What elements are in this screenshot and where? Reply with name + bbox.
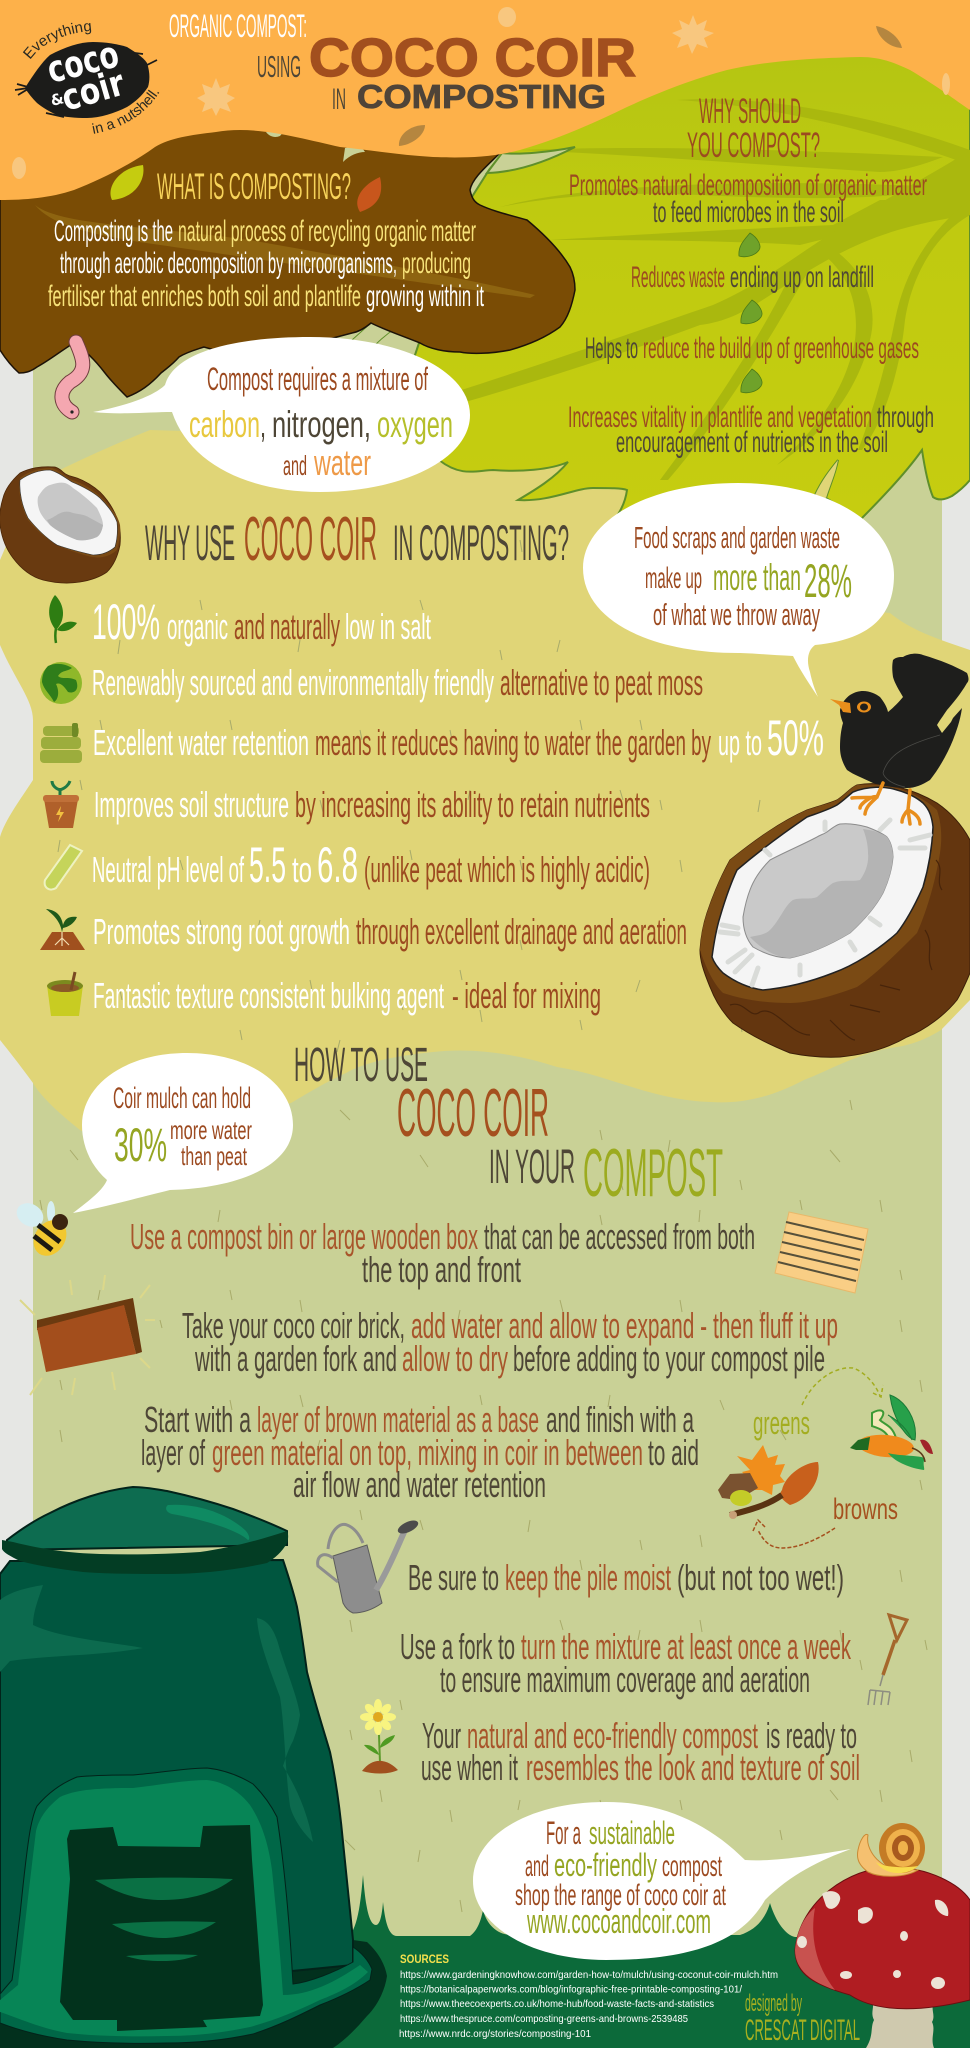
icon: soil mound with sprout bbox=[40, 909, 85, 950]
speech bubble: sustainable compost: www.cocoandcoir.com bbox=[526, 1903, 711, 1941]
label: greens: greens bbox=[753, 1405, 810, 1441]
text: what is composting paragraph: fertiliser that enriches both soil and plantlife bbox=[48, 280, 361, 313]
text: step 3: to aid bbox=[648, 1432, 699, 1473]
logo: everything coco and coir in a nutshell: coco bbox=[43, 33, 123, 92]
list: benefits of coco coir: up to bbox=[718, 722, 762, 763]
title: COMPOSTING bbox=[357, 78, 606, 115]
icon: globe bbox=[40, 662, 82, 704]
list: benefits of coco coir bbox=[92, 594, 824, 1016]
speech bubble: compost mixture: oxygen bbox=[377, 404, 453, 445]
speech bubble: food scraps bbox=[583, 483, 894, 697]
text: what is composting paragraph: growing within it bbox=[366, 280, 484, 313]
text: what is composting paragraph: producing bbox=[402, 247, 471, 280]
speech bubble: sustainable compost: sustainable bbox=[589, 1815, 675, 1851]
text: WHAT IS COMPOSTING? bbox=[157, 166, 351, 207]
bin lid bbox=[7, 1487, 287, 1550]
speech bubble: coir mulch: more water bbox=[170, 1115, 252, 1145]
illustration: compost bin bbox=[0, 1487, 387, 2048]
list: benefits of coco coir: Excellent water retention bbox=[93, 722, 309, 763]
text: step 3 bbox=[141, 1399, 699, 1505]
text: step 5: Use a fork to bbox=[400, 1626, 515, 1667]
text: step 2: Take your coco coir brick, bbox=[182, 1305, 405, 1346]
text: step 3: Start with a bbox=[144, 1399, 252, 1440]
list: benefits of coco coir: alternative to peat moss bbox=[500, 662, 703, 703]
text: designed by credit: designed by bbox=[745, 1990, 802, 2017]
text: step 3: layer of brown material as a base bbox=[257, 1399, 539, 1440]
speech bubble: food scraps: of what we throw away bbox=[653, 597, 820, 632]
text: step 4 bbox=[408, 1557, 844, 1598]
speech bubble: sustainable compost: shop the range of coco coir at bbox=[515, 1879, 726, 1912]
text: COMPOST bbox=[583, 1135, 723, 1211]
icon: watering can bbox=[318, 1518, 420, 1613]
grass ground bbox=[330, 1875, 970, 2048]
brown blob panel bbox=[0, 120, 575, 397]
speech bubble: sustainable compost: compost bbox=[662, 1850, 722, 1883]
list: benefits of coco coir: low in salt bbox=[345, 606, 431, 647]
grey left margin wedge bbox=[0, 645, 33, 837]
heading: how to use coco coir in your compost: HOW TO USE bbox=[294, 1039, 428, 1092]
list: benefits of coco coir: organic bbox=[167, 606, 228, 647]
list: why compost benefits bbox=[568, 169, 934, 459]
speech bubble: food scraps: more than bbox=[713, 557, 801, 598]
text: sources: https://botanicalpaperworks.com/blog/infographic-free-printable-composting-101/ bbox=[400, 1984, 742, 1996]
list: benefits of coco coir: 50% bbox=[767, 710, 824, 766]
icon: coir brick bbox=[20, 1275, 155, 1395]
speech bubble: compost mixture bbox=[93, 337, 470, 492]
leaf: lime green background for why compost bbox=[352, 30, 970, 523]
speech bubble: food scraps: 28% bbox=[804, 554, 852, 607]
text: step 6: is ready to bbox=[766, 1715, 857, 1756]
list: benefits of coco coir: Neutral pH level of bbox=[92, 849, 245, 890]
speech bubble: compost mixture: water bbox=[313, 442, 371, 483]
yellow wave background bbox=[0, 430, 970, 1150]
text: step 1 bbox=[130, 1216, 755, 1290]
orange header band bbox=[0, 0, 970, 200]
text: what is composting paragraph: Composting is the bbox=[54, 215, 173, 248]
arrow: browns to greens bbox=[802, 1368, 883, 1405]
logo: everything coco and coir in a nutshell bbox=[14, 22, 160, 134]
speech bubble: coir mulch bbox=[73, 1053, 293, 1213]
text: sources: https://www.nrdc.org/stories/composting-101 bbox=[399, 2028, 591, 2040]
text: step 1: Use a compost bin or large wooden box bbox=[130, 1216, 478, 1257]
list: why compost benefits: Reduces waste bbox=[631, 261, 725, 294]
logo: everything coco and coir in a nutshell: & bbox=[49, 89, 66, 110]
title: IN bbox=[332, 83, 346, 116]
text: step 4: keep the pile moist bbox=[505, 1557, 671, 1598]
icon: bucket with trowel bbox=[47, 972, 83, 1016]
title bbox=[169, 8, 636, 116]
text: step 3: green material on top, mixing in coir in between bbox=[212, 1432, 643, 1473]
text: step 1: the top and front bbox=[362, 1249, 521, 1290]
arrow: greens to browns bbox=[753, 1520, 835, 1548]
logo: everything coco and coir in a nutshell: in a nutshell. bbox=[92, 90, 160, 134]
speech bubble: coir mulch: Coir mulch can hold bbox=[113, 1082, 251, 1115]
text: what is composting paragraph bbox=[48, 215, 484, 313]
illustration: brown leaves bbox=[718, 1445, 819, 1519]
text: designed by credit bbox=[745, 1990, 860, 2047]
logo: everything coco and coir in a nutshell: coir bbox=[57, 63, 129, 120]
speech bubble: compost mixture: , bbox=[260, 404, 266, 445]
logo: everything coco and coir in a nutshell: Everything bbox=[22, 22, 92, 59]
text: step 5 bbox=[400, 1626, 852, 1700]
icon: sprout bbox=[49, 595, 77, 643]
speech bubble: food scraps: make up bbox=[645, 562, 702, 595]
icon: stacked coir bbox=[40, 723, 82, 763]
text: step 2: allow to dry bbox=[402, 1338, 508, 1379]
speech bubble: compost mixture: and bbox=[283, 450, 307, 481]
speech bubble: compost mixture: nitrogen, bbox=[272, 404, 371, 445]
list: benefits of coco coir: Improves soil structure bbox=[94, 784, 289, 825]
title: USING bbox=[257, 49, 301, 84]
text: step 6: Your bbox=[422, 1715, 461, 1756]
list: benefits of coco coir: Promotes strong root growth bbox=[93, 911, 350, 952]
text: sources: https://www.gardeningknowhow.com/garden-how-to/mulch/using-coconut-coir-mulch.htm bbox=[400, 1969, 778, 1981]
text: step 6 bbox=[421, 1715, 860, 1788]
icon: bee bbox=[12, 1198, 73, 1262]
text: sources: https://www.thespruce.com/composting-greens-and-browns-2539485 bbox=[400, 2013, 688, 2025]
icon: garden fork bbox=[868, 1615, 907, 1705]
text: step 4: (but not too wet!) bbox=[677, 1557, 844, 1598]
speech bubble: sustainable compost: and bbox=[525, 1850, 549, 1883]
text: what is composting paragraph: through aerobic decomposition by microorganisms, bbox=[60, 247, 397, 280]
list: benefits of coco coir: Renewably sourced and environmentally friendly bbox=[92, 662, 494, 703]
heading: why use coco coir in composting: WHY USE bbox=[145, 515, 235, 571]
text: step 2: with a garden fork and bbox=[194, 1338, 397, 1379]
heading: why should you compost bbox=[687, 92, 820, 165]
speech bubble: compost mixture: carbon bbox=[189, 404, 260, 445]
list: benefits of coco coir: - ideal for mixing bbox=[452, 975, 601, 1016]
illustration: blackbird bbox=[830, 654, 968, 824]
text: what is composting paragraph: natural process of recycling organic matter bbox=[178, 215, 476, 248]
list: benefits of coco coir: 100% bbox=[92, 594, 160, 650]
list: benefits of coco coir: 6.8 bbox=[317, 837, 358, 893]
illustration: green scraps bbox=[850, 1395, 933, 1470]
icon: small coconut bbox=[0, 467, 120, 583]
speech bubble: compost mixture: Compost requires a mixture of bbox=[207, 361, 428, 397]
list: benefits of coco coir: by increasing its ability to retain nutrients bbox=[295, 784, 650, 825]
text: sources: SOURCES bbox=[400, 1952, 449, 1966]
speech bubble: coir mulch: 30% bbox=[114, 1118, 167, 1171]
heading: how to use coco coir in your compost: IN YOUR bbox=[489, 1141, 575, 1194]
speech bubble: sustainable compost: eco-friendly bbox=[554, 1847, 657, 1883]
list: benefits of coco coir: (unlike peat which is highly acidic) bbox=[364, 849, 650, 890]
text: step 6: use when it bbox=[421, 1747, 518, 1788]
speech bubble: sustainable compost bbox=[473, 1802, 851, 1960]
icon: flower bbox=[360, 1699, 398, 1774]
text: IN COMPOSTING? bbox=[393, 515, 569, 571]
illustration: big coconut bbox=[700, 784, 970, 1057]
list: why compost benefits: Helps to bbox=[585, 332, 638, 365]
icon: orange leaf bbox=[357, 177, 381, 212]
title: COCO COIR bbox=[309, 28, 636, 88]
text: sources bbox=[399, 1952, 778, 2040]
list: benefits of coco coir: to bbox=[292, 849, 312, 890]
text: sources: https://www.theecoexperts.co.uk/home-hub/food-waste-facts-and-statistics bbox=[400, 1998, 714, 2010]
text: step 2 bbox=[182, 1305, 838, 1379]
decorative leaves on header bbox=[12, 7, 950, 179]
text: step 3: air flow and water retention bbox=[293, 1464, 546, 1505]
text: step 3: layer of bbox=[141, 1432, 206, 1473]
icon: plant pot bbox=[43, 781, 79, 828]
icon: lime leaf bbox=[110, 165, 143, 200]
list: benefits of coco coir: Fantastic texture consistent bulking agent bbox=[93, 975, 444, 1016]
list: benefits of coco coir: and naturally bbox=[234, 606, 340, 647]
icon: worm bbox=[62, 342, 83, 414]
label: browns: browns bbox=[833, 1493, 898, 1526]
text: step 3: and finish with a bbox=[546, 1399, 695, 1440]
icon: wooden box bbox=[775, 1212, 868, 1293]
heading: how to use coco coir in your compost: COCO COIR bbox=[397, 1075, 549, 1151]
title: ORGANIC COMPOST: bbox=[169, 8, 307, 44]
heading: why use coco coir in composting: COCO COIR bbox=[244, 505, 377, 574]
list: benefits of coco coir: 5.5 bbox=[249, 837, 286, 893]
illustration: snail bbox=[857, 1823, 925, 1876]
text: YOU COMPOST? bbox=[687, 126, 820, 165]
text: step 4: Be sure to bbox=[408, 1557, 499, 1598]
icon: small leaves between list items bbox=[739, 233, 762, 393]
bin base shadow bbox=[0, 1940, 387, 2048]
heading: how to use coco coir in your compost bbox=[294, 1039, 723, 1211]
speech bubble: sustainable compost: For a bbox=[546, 1815, 581, 1851]
heading: why should you compost: WHY SHOULD bbox=[699, 92, 801, 131]
illustration: mushroom bbox=[795, 1867, 970, 2048]
speech bubble: coir mulch: than peat bbox=[181, 1141, 247, 1171]
icon: test tube bbox=[45, 845, 82, 890]
